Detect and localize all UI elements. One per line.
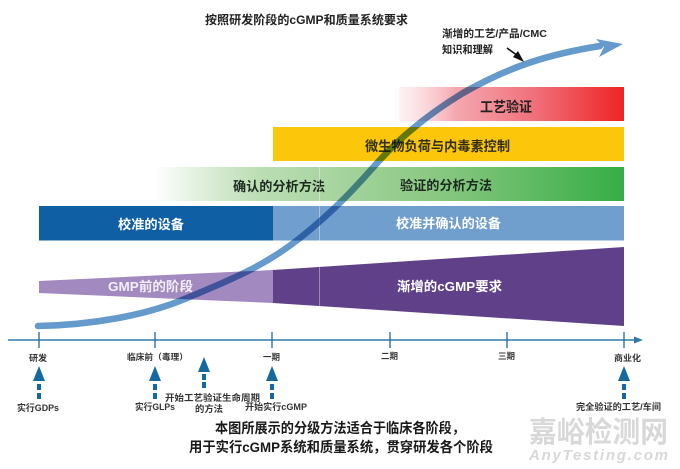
bar: qualified and validated analytical methods: 确认的分析方法 [233, 179, 325, 194]
curve annotation: 渐增的工艺/产品/CMC [442, 27, 547, 40]
bar: calibrated equipment [39, 206, 273, 240]
milestone captions [17, 392, 661, 414]
stage labels: 商业化 [614, 353, 642, 363]
bar: qualified and validated analytical methods [155, 167, 624, 201]
stage labels: 研发 [29, 353, 48, 363]
milestone captions: 实行GDPs [17, 402, 59, 413]
arrow: annotation pointer [507, 48, 524, 62]
stage labels: 临床前（毒理） [127, 352, 188, 362]
milestone arrows [33, 357, 630, 399]
milestone captions: 完全验证的工艺/车间 [576, 401, 661, 412]
bar: bioburden and endotoxin control [273, 127, 624, 161]
curve annotation [442, 27, 547, 56]
watermark [528, 416, 668, 464]
bar: qualified and validated analytical methods: 验证的分析方法 [400, 178, 492, 193]
stage labels: 一期 [263, 352, 280, 362]
milestone captions: 开始实行cGMP [245, 401, 307, 412]
bar: calibrated and qualified equipment [273, 206, 624, 240]
bottom caption [189, 420, 493, 455]
wedge: increasing cGMP requirements [273, 247, 624, 326]
wedge: increasing cGMP requirements: 渐增的cGMP要求 [397, 279, 502, 294]
watermark: 嘉峪检测网 [529, 416, 668, 449]
wedge: pre-GMP phase: GMP前的阶段 [108, 279, 193, 294]
bar: bioburden and endotoxin control: 微生物负荷与内毒素控制 [365, 138, 510, 154]
bar: calibrated equipment: 校准的设备 [118, 217, 184, 232]
bar: process validation [399, 87, 624, 121]
bar: calibrated and qualified equipment: 校准并确认的设备 [396, 216, 501, 231]
milestone captions: 开始工艺验证生命周期 [165, 392, 260, 403]
milestone captions: 实行GLPs [135, 401, 175, 412]
wedge: pre-GMP phase [39, 270, 273, 303]
rising knowledge curve arrow [38, 39, 623, 326]
bar: process validation: 工艺验证 [480, 99, 532, 115]
curve annotation: 知识和理解 [442, 43, 493, 56]
bottom caption: 用于实行cGMP系统和质量系统，贯穿研发各个阶段 [189, 439, 493, 455]
stage labels: 二期 [381, 351, 398, 361]
title: 按照研发阶段的cGMP和质量系统要求 [205, 12, 408, 27]
stage labels: 三期 [498, 351, 515, 361]
timeline axis [8, 332, 643, 348]
stage labels [29, 351, 642, 363]
bottom caption: 本图所展示的分级方法适合于临床各阶段， [215, 420, 465, 436]
milestone captions: 的方法 [195, 403, 223, 414]
watermark: AnyTesting.com [528, 447, 668, 464]
